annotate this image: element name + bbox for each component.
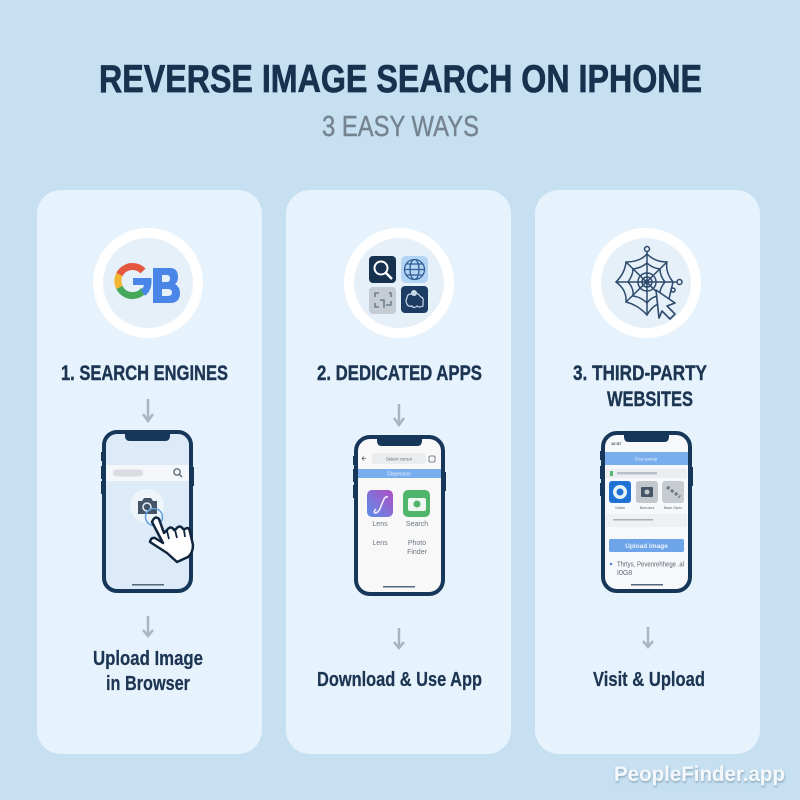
icon: app tiles [349, 233, 449, 333]
icon: pointing hand [150, 518, 193, 562]
arrow [394, 628, 404, 648]
phone: app list: Dispersion [387, 472, 411, 478]
icon: G and B logo [98, 233, 198, 333]
watermark: PeopleFinder.app [614, 763, 785, 786]
caption: visit and upload: Visit & Upload [593, 669, 705, 691]
arrow [143, 399, 153, 421]
phone: app list: Search [406, 521, 428, 528]
phone: upload site: Bonuses [640, 506, 654, 510]
heading: third-party websites [573, 362, 707, 411]
phone: upload site [600, 432, 693, 591]
icon: web and cursor [596, 233, 696, 333]
panel: search engines [37, 190, 262, 754]
phone: upload site: Thrtys, Pevenrehhege .al [617, 562, 684, 568]
arrow [394, 404, 404, 425]
phone: app list: Lens [372, 540, 388, 547]
heading: third-party websites: 3. THIRD-PARTY [573, 362, 707, 385]
phone: app list: Lens [372, 521, 388, 528]
phone: app list: Photo [408, 540, 426, 547]
caption: upload image in browser: in Browser [106, 673, 190, 695]
phone: upload site: Upload Image [625, 543, 668, 550]
arrow [143, 616, 153, 636]
panel: third-party websites [535, 190, 760, 754]
heading: search engines: 1. SEARCH ENGINES [61, 362, 228, 385]
phone: app list: Finder [407, 549, 428, 556]
heading: dedicated apps: 2. DEDICATED APPS [317, 362, 482, 385]
phone: app list: Select cursor [386, 456, 413, 462]
panel: dedicated apps [286, 190, 511, 754]
icon: search camera app [403, 490, 430, 517]
subtitle: 3 EASY WAYS [322, 111, 479, 143]
phone: app list [353, 436, 446, 594]
phone: upload site: Bass Open [664, 506, 682, 510]
icon: lens app [367, 490, 393, 517]
phone: upload site: 16:57 [611, 441, 622, 446]
phone: upload in browser [101, 431, 194, 591]
heading: third-party websites: WEBSITES [607, 388, 693, 411]
arrow [643, 627, 653, 647]
caption: upload image in browser: Upload Image [93, 648, 203, 670]
phone: upload site: Ensi yanop [635, 456, 658, 462]
phone: upload site: I0G8 [617, 570, 632, 577]
caption: download and use app: Download & Use App [317, 669, 482, 691]
caption: upload image in browser [93, 648, 203, 695]
phone: upload site: Safari [615, 506, 625, 510]
